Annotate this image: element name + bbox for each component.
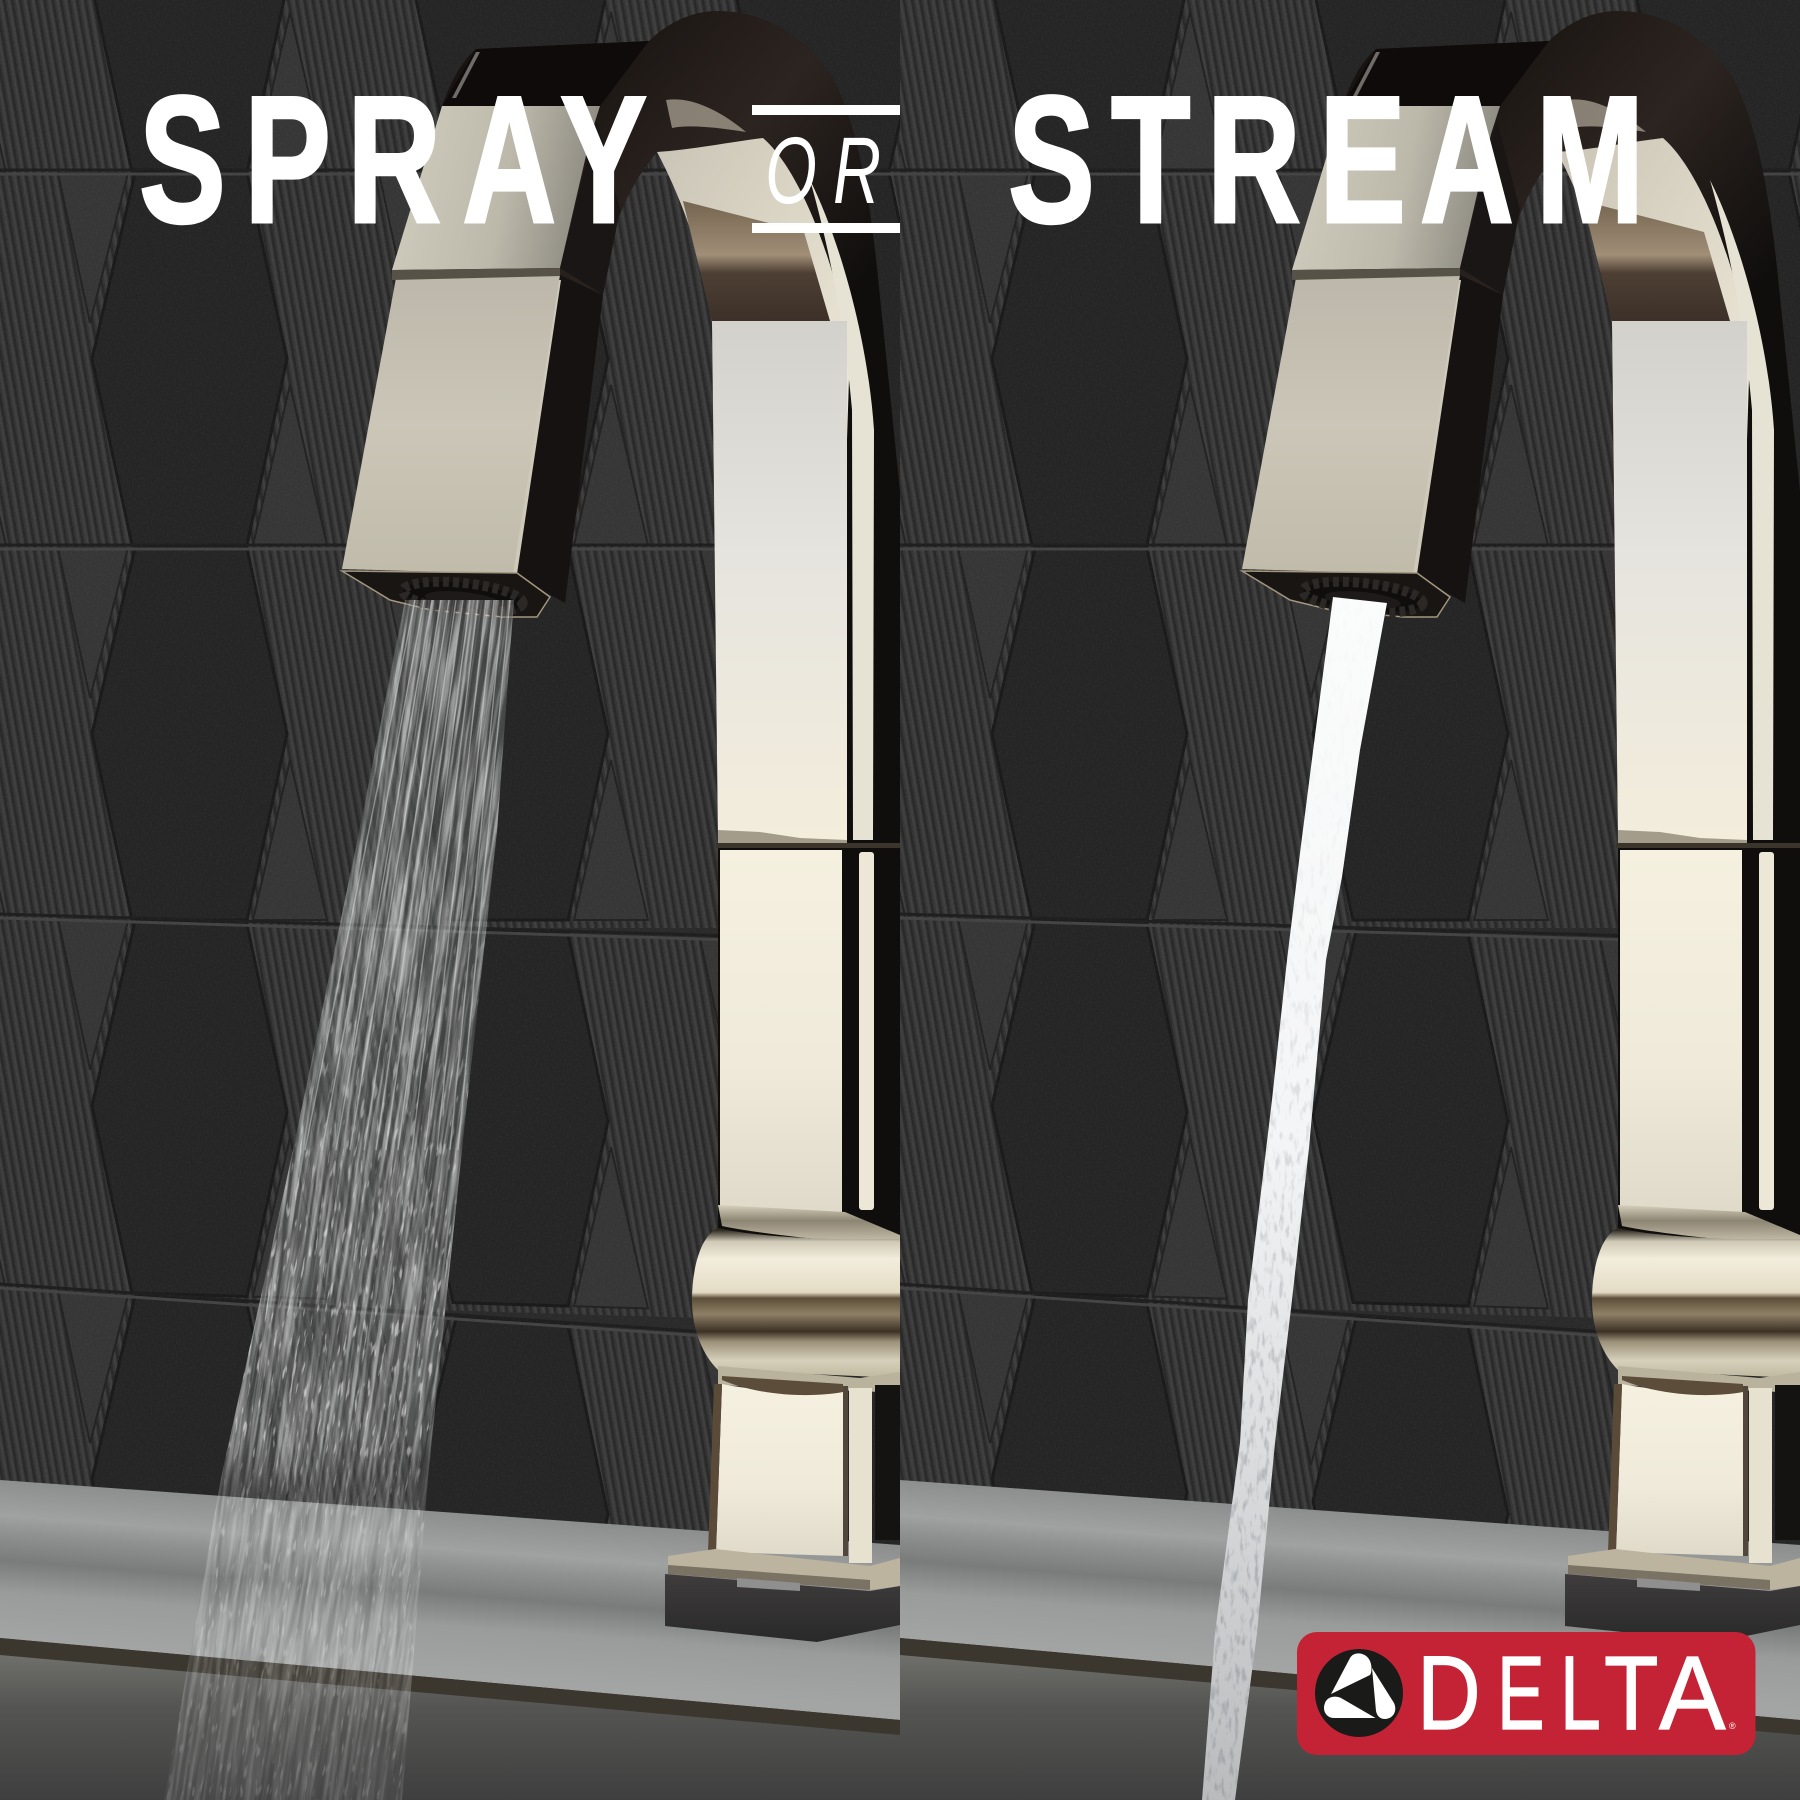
head underside xyxy=(342,571,550,617)
panel: spray faucet scene xyxy=(0,0,960,1800)
heading: OR with rules: OR xyxy=(765,118,881,224)
faucet lower block xyxy=(708,1376,872,1563)
tile wall background xyxy=(0,0,960,1732)
black base xyxy=(665,1574,900,1642)
head upper section xyxy=(392,106,600,270)
head side face xyxy=(512,120,620,603)
spray jets xyxy=(305,600,510,1150)
logo wordmark: L xyxy=(1560,1635,1601,1752)
logo wordmark: T xyxy=(1604,1634,1659,1752)
side highlight strip xyxy=(810,180,874,840)
nozzle ring xyxy=(402,577,524,617)
spray water xyxy=(164,600,514,1800)
column seam xyxy=(716,830,900,848)
faucet base plate xyxy=(668,1549,900,1590)
panel: stream faucet scene xyxy=(832,0,1800,1800)
logo wordmark: E xyxy=(1497,1635,1545,1752)
faucet column upper xyxy=(712,321,847,840)
logo wordmark xyxy=(1417,1634,1736,1752)
logo: Delta xyxy=(1297,1632,1756,1755)
heading: STREAM: STREAM xyxy=(1008,59,1644,261)
brown reflection on arch xyxy=(683,201,830,321)
faucet column lower xyxy=(720,850,874,1212)
logo wordmark: ® xyxy=(1729,1721,1736,1731)
logo wordmark: A xyxy=(1659,1634,1726,1752)
pull-down spray head xyxy=(342,106,620,617)
logo emblem xyxy=(1315,1649,1403,1737)
logo wordmark: D xyxy=(1417,1634,1481,1752)
heading: OR with rules xyxy=(752,105,900,233)
inner arch cream face xyxy=(657,138,850,440)
faucet base knob xyxy=(692,1205,900,1540)
faucet spout arch xyxy=(392,11,900,1245)
head seam xyxy=(392,268,560,280)
logo red badge xyxy=(1297,1632,1756,1755)
heading: SPRAY: SPRAY xyxy=(139,59,647,261)
stream water xyxy=(1202,597,1387,1800)
countertop xyxy=(0,1480,900,1720)
counter edge and sink xyxy=(0,1638,900,1800)
head front face xyxy=(342,275,560,574)
